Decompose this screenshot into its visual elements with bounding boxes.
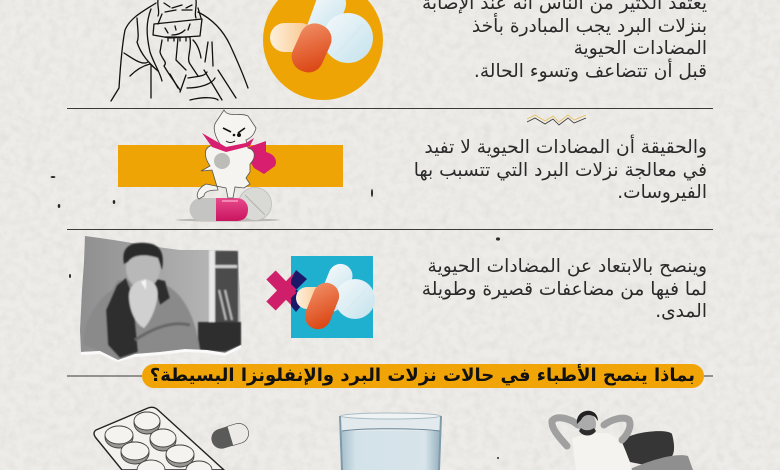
text block: intro: المضادات الحيوية <box>574 38 707 59</box>
orange banner <box>118 145 343 187</box>
illustration: man sneezing line art <box>111 0 248 101</box>
text block: fact <box>414 134 707 203</box>
decorative zigzag <box>527 115 586 125</box>
illustration: glass of water <box>340 413 441 470</box>
illustration: blister pack sketch <box>94 407 224 470</box>
text block: advice: وينصح بالابتعاد عن المضادات الحيوية <box>428 256 707 277</box>
illustration: capsule sketch <box>209 421 251 451</box>
ink specks <box>51 170 500 459</box>
text block: advice: المدى. <box>655 301 707 322</box>
illustration: germ on capsule <box>176 110 280 222</box>
text block: advice: لما فيها من مضاعفات قصيرة وطويلة <box>422 278 707 300</box>
dividers <box>67 108 713 376</box>
text block: intro: بنزلات البرد يجب المبادرة بأخذ <box>472 16 707 36</box>
text block: intro <box>422 0 707 82</box>
icon: tablets on blue square with red cross <box>271 256 375 338</box>
photo: man relaxing on sofa <box>552 411 693 470</box>
text block: fact: الفيروسات. <box>617 182 707 203</box>
photo: man blowing nose, torn paper <box>80 236 241 362</box>
text block: fact: والحقيقة أن المضادات الحيوية لا تفيد <box>424 137 707 158</box>
heading: doctors advice: بماذا ينصح الأطباء في حالات نزلات البرد والإنفلونزا البسيطة؟ <box>150 365 695 386</box>
text block: intro: قبل أن تتضاعف وتسوء الحالة. <box>474 60 707 82</box>
text block: fact: في معالجة نزلات البرد التي تتسبب بها <box>414 160 707 180</box>
icon: tablets on orange circle <box>263 0 383 100</box>
text block: advice <box>422 256 707 322</box>
